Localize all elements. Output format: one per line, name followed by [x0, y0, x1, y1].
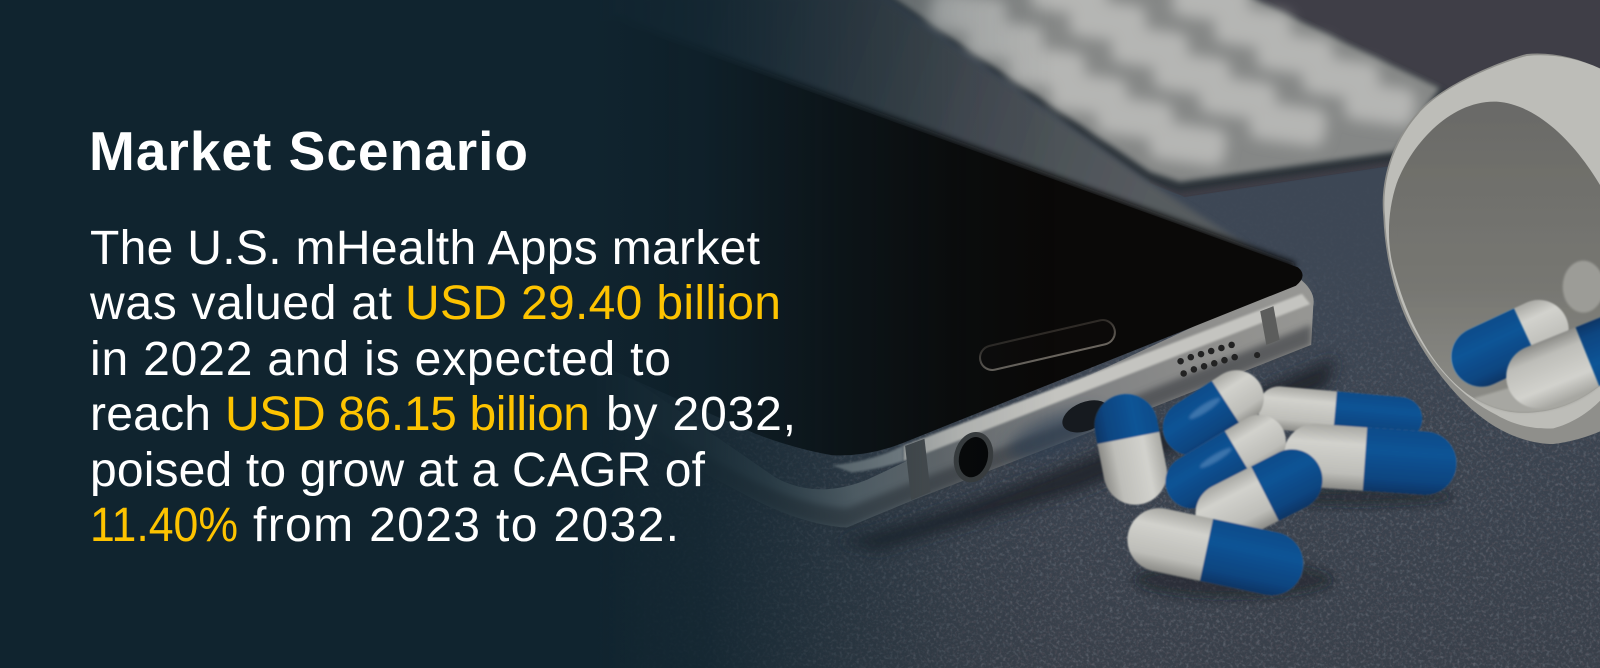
market description text: was valued at	[89, 277, 392, 330]
photo: spilled blue and white capsules	[1089, 360, 1459, 601]
metal notches	[905, 439, 931, 500]
corner highlight	[832, 446, 903, 472]
market description text: The U.S. mHealth Apps market	[90, 222, 760, 275]
port reflection	[1002, 398, 1110, 470]
market description text: USD 86.15 billion	[225, 388, 590, 441]
market description text: reach	[90, 388, 211, 441]
phone screen	[510, 20, 1303, 455]
home button	[978, 318, 1117, 372]
photo: medicine bottle with capsules	[1383, 54, 1600, 444]
photo: blister pack	[880, 0, 1600, 197]
screen edge highlight	[903, 294, 1310, 461]
headphone jack	[948, 428, 998, 487]
market description text: from 2023 to 2032.	[253, 499, 679, 552]
market description text: in 2022 and is expected to	[90, 333, 671, 386]
title: Market Scenario	[89, 120, 528, 182]
market description text	[89, 222, 796, 552]
phone lower edge shading	[653, 324, 1311, 528]
market description text: 11.40%	[90, 499, 238, 552]
market description text: USD 29.40 billion	[405, 277, 781, 330]
speaker holes	[1177, 342, 1260, 377]
screen soft top edge	[612, 20, 1294, 267]
phone body	[571, 278, 1314, 528]
market description text: by 2032,	[606, 388, 796, 441]
market description text: poised to grow at a CAGR of	[90, 444, 706, 497]
photo: smartphone	[510, 0, 1337, 551]
charging port	[1058, 394, 1114, 439]
